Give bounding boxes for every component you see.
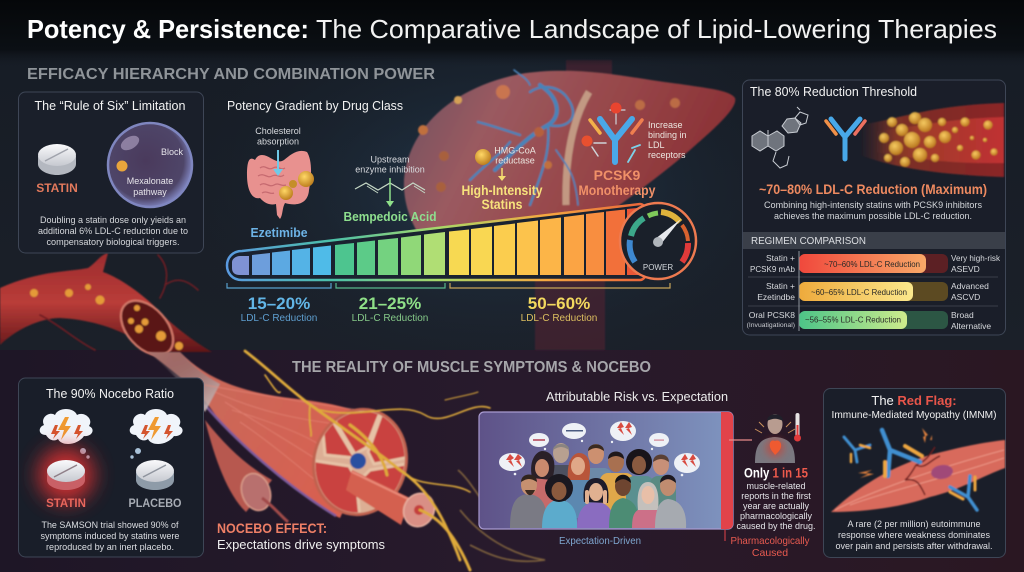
text: only 1 in 15: caused by the drug. (736, 521, 816, 531)
icon: person with thermometer (755, 413, 801, 463)
text: SAMSON trial: The SAMSON trial showed 90% of (42, 520, 179, 530)
drug: high-intensity statins (462, 146, 543, 212)
text: only 1 in 15: Only 1 in 15 (744, 464, 808, 480)
range: 15-20%: LDL-C Reduction (241, 313, 317, 324)
label: pharmacologically caused: Caused (752, 547, 788, 559)
drug: ezetimibe: absorption (257, 136, 299, 146)
text: rule of six description: additional 6% LDL-C reduction due to (38, 226, 188, 236)
row: statin + PCSK9: ASEVD (951, 264, 980, 274)
illustration: muscle fibre attacked by antibodies (831, 428, 1005, 512)
drug: bempedoic acid (344, 154, 437, 224)
drug: PCSK9 monotherapy: PCSK9 (594, 167, 641, 183)
band: regimen comparison (743, 232, 1005, 249)
drug: PCSK9 monotherapy: receptors (648, 150, 686, 160)
heading: The 90% Nocebo Ratio (46, 387, 174, 401)
panel: 80% threshold (742, 80, 1006, 335)
text: only 1 in 15 (736, 464, 816, 531)
thought bubbles (499, 421, 700, 476)
icon: placebo pill (136, 460, 174, 490)
panel: 80% threshold: achieves the maximum possible LDL-C reduction. (774, 211, 972, 222)
heading: The 80% Reduction Threshold (750, 84, 917, 99)
drug: bempedoic acid: Bempedoic Acid (344, 209, 437, 224)
row: oral PCSK9: Alternative (951, 321, 991, 331)
label: statin: STATIN (46, 498, 86, 510)
text: only 1 in 15: reports in the first (741, 491, 811, 501)
text: maximum reduction: ~70–80% LDL-C Reduction (Maximum) (759, 181, 987, 197)
text: SAMSON trial: symptoms induced by statins were (40, 531, 180, 541)
text: only 1 in 15: muscle-related (746, 481, 806, 491)
panel: rule of six (18, 92, 204, 253)
drug: high-intensity statins: HMG-CoA (494, 146, 536, 156)
row: statin + PCSK9: Statin + (766, 253, 795, 263)
drug: PCSK9 monotherapy: Monotherapy (578, 182, 656, 198)
heading: red flag: The Red Flag: (871, 393, 957, 408)
drug: high-intensity statins: reductase (495, 156, 535, 166)
muscle illustration (148, 351, 545, 570)
icon: mevalonate sphere: Block (161, 147, 184, 157)
callout: nocebo effect (217, 521, 385, 552)
text: rule of six description: compensatory biological triggers. (46, 237, 180, 247)
people: back row (527, 443, 676, 523)
text: SAMSON trial: reproduced by an inert placebo. (46, 542, 174, 552)
range: 15-20% (241, 294, 317, 324)
row: oral PCSK9: (Invuatigational) (747, 322, 795, 329)
range: 21-25%: 21–25% (359, 294, 421, 313)
text: red flag description: A rare (2 per million) eutoimmune (848, 519, 980, 530)
icon: mevalonate sphere: pathway (133, 187, 167, 197)
label: expectation-driven: Expectation-Driven (559, 536, 641, 547)
icon: statin thought cloud (40, 409, 93, 459)
callout: nocebo effect: NOCEBO EFFECT: (217, 521, 327, 536)
icon: mevalonate sphere (108, 123, 192, 207)
drug: PCSK9 monotherapy: LDL (648, 140, 665, 150)
text: rule of six description (38, 215, 188, 247)
row: statin + PCSK9: ~70–60% LDL-C Reduction (824, 259, 920, 269)
range: 50-60% (521, 294, 597, 324)
icon: intestine (247, 150, 314, 219)
row: statin + ezetimibe: Advanced (951, 281, 989, 291)
band: regimen comparison: REGIMEN COMPARISON (751, 235, 866, 247)
heading: potency gradient: Potency Gradient by Drug Class (227, 99, 403, 113)
heading: attributable risk: Attributable Risk vs. Expectation (546, 390, 728, 404)
row: statin + PCSK9 (750, 253, 1001, 274)
text: red flag description (836, 519, 992, 552)
title: Potency & Persistence: (27, 14, 309, 44)
text: red flag description: response where weakness dominates (838, 530, 990, 541)
heading: rule of six: The “Rule of Six” Limitation (34, 99, 186, 113)
row: statin + ezetimibe (757, 281, 989, 302)
drug: bempedoic acid: enzyme inhibition (355, 164, 425, 174)
connector line (729, 439, 752, 441)
people: front row (510, 474, 686, 528)
row: oral PCSK9: Broad (951, 310, 974, 320)
icon: statin pill glowing (38, 447, 94, 503)
drug: PCSK9 monotherapy: Increase (648, 120, 683, 130)
row: oral PCSK9: Oral PCSK8 (749, 310, 795, 320)
power gauge (620, 203, 696, 279)
chart: crowd proportional bar (479, 412, 733, 529)
row: oral PCSK9 (747, 310, 991, 331)
drug: ezetimibe: Cholesterol (255, 126, 301, 136)
range: 21-25%: LDL-C Reduction (352, 313, 428, 324)
panel: 80% threshold: Combining high-intensity statins with PCSK9 inhibitors (764, 200, 982, 211)
drug: high-intensity statins: Statins (482, 197, 522, 212)
heading: red flag (832, 393, 996, 421)
drug: PCSK9 monotherapy: binding in (648, 130, 687, 140)
drug: ezetimibe: Ezetimibe (250, 225, 308, 240)
row: statin + PCSK9: PCSK9 mAb (750, 264, 795, 274)
drug: bempedoic acid: Upstream (370, 154, 410, 164)
icon: molecule with arrow (355, 178, 425, 207)
icon: antibody (826, 119, 865, 159)
row: oral PCSK9: ~56–55% LDL-C Reduction (805, 314, 901, 324)
label: placebo: PLACEBO (128, 498, 182, 510)
icon: HMG enzyme ball (475, 149, 491, 165)
range: 50-60%: LDL-C Reduction (521, 313, 597, 324)
row: statin + ezetimibe: Ezetindbe (757, 292, 795, 302)
row: statin + ezetimibe: Statin + (766, 281, 795, 291)
text: rule of six description: Doubling a statin dose only yieids an (40, 215, 186, 225)
text: red flag description: over pain and persists after withdrawal. (836, 541, 992, 552)
range: 21-25% (352, 294, 428, 324)
artery illustration (0, 253, 212, 365)
range: 15-20%: 15–20% (248, 294, 310, 313)
section heading: muscle symptoms: THE REALITY OF MUSCLE SYMPTOMS & NOCEBO (292, 359, 651, 376)
liver illustration (404, 60, 735, 350)
illustration: plaque in artery (860, 103, 1004, 177)
drug: PCSK9 monotherapy (578, 102, 687, 198)
label: statin: STATIN (36, 181, 78, 195)
text: only 1 in 15: year are actually (743, 501, 810, 511)
text: SAMSON trial (40, 520, 180, 552)
icon: mevalonate sphere: Mexalonate (127, 176, 173, 186)
drug: high-intensity statins: High-Intensity (462, 183, 543, 198)
label: pharmacologically caused (725, 529, 810, 559)
header band (0, 0, 1024, 66)
row: statin + PCSK9: Very high-risk (951, 253, 1001, 263)
panel: nocebo ratio (18, 378, 204, 557)
panel: red flag (824, 388, 1006, 558)
potency gradient bar (227, 204, 651, 280)
drug: ezetimibe (247, 126, 314, 240)
range brackets (227, 283, 670, 288)
row: statin + ezetimibe: ASCVD (951, 292, 980, 302)
text: only 1 in 15: pharmacologically (740, 511, 813, 521)
callout: nocebo effect: Expectations drive symptoms (217, 537, 385, 552)
title: The Comparative Landscape of Lipid-Lowering Therapies (316, 14, 997, 44)
icon: statin pill (38, 144, 76, 175)
icon: placebo thought cloud (130, 409, 183, 459)
power gauge: POWER (643, 263, 673, 272)
row: statin + ezetimibe: ~60–65% LDL-C Reduction (811, 287, 907, 297)
title (27, 14, 997, 44)
icon: statin molecule (752, 107, 808, 168)
icon: antibody (590, 110, 642, 162)
range: 50-60%: 50–60% (528, 294, 590, 313)
section heading: efficacy: EFFICACY HIERARCHY AND COMBINATION POWER (27, 66, 435, 83)
label: pharmacologically caused: Pharmacologically (730, 535, 810, 547)
heading: red flag: Immune-Mediated Myopathy (IMNM) (832, 409, 996, 421)
